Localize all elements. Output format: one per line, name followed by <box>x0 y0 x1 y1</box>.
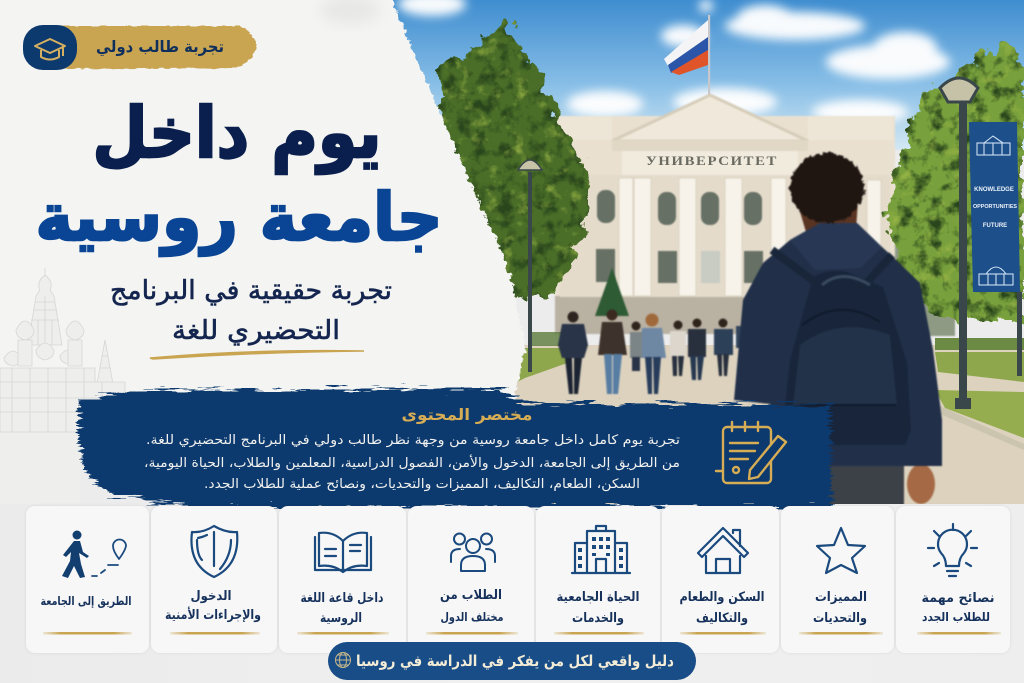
hair <box>790 153 864 223</box>
card: campus life: والخدمات <box>572 611 624 626</box>
panel text <box>144 433 680 492</box>
right tree <box>884 42 1024 322</box>
underline <box>426 632 518 634</box>
card: entry and security <box>151 506 277 653</box>
title line 1: يوم داخل <box>92 92 382 175</box>
icon: campus building <box>572 526 630 573</box>
hand <box>907 464 935 504</box>
topic cards <box>26 506 1010 653</box>
badge text: تجربة طالب دولي <box>96 37 224 57</box>
underline <box>799 632 883 634</box>
banner words: OPPORTUNITIES <box>973 204 1017 210</box>
icon: light bulb <box>928 524 977 576</box>
subtitle <box>110 276 392 359</box>
label: نصائح مهمة <box>922 591 994 606</box>
card: international students: مختلف الدول <box>440 610 504 625</box>
card: housing, food, costs <box>662 506 779 653</box>
label: الحياة الجامعية <box>556 590 640 605</box>
underline <box>43 632 132 634</box>
underline <box>680 632 766 634</box>
background: campus photo <box>380 0 1024 510</box>
underline <box>297 632 389 634</box>
ground <box>500 332 1024 510</box>
card: international students <box>408 506 534 653</box>
main student from behind <box>734 153 942 510</box>
label: الطلاب من <box>440 588 502 603</box>
underline <box>170 632 260 634</box>
panel text: السكن، الطعام، التكاليف، المميزات والتحديات، ونصائح عملية للطلاب الجدد. <box>204 477 640 492</box>
clouds <box>398 0 950 124</box>
card: housing, food, costs: والتكاليف <box>696 611 748 626</box>
label: المميزات <box>815 590 867 605</box>
bottom paper background <box>0 400 80 510</box>
icon: globe <box>336 652 350 668</box>
card: classroom <box>279 506 406 653</box>
flag <box>664 15 710 97</box>
university building <box>555 95 955 336</box>
gold underline <box>150 351 364 359</box>
torn white paper panel <box>0 0 526 405</box>
sky <box>380 0 1024 150</box>
backpack <box>785 271 911 445</box>
building sign: УНИВЕРСИТЕТ <box>646 153 778 168</box>
banner icon top <box>977 136 1010 155</box>
panel heading: مختصر المحتوى <box>402 405 532 424</box>
title <box>36 92 442 257</box>
label: الدخول <box>190 589 232 604</box>
icon: walking person <box>62 530 126 578</box>
card: important tips <box>896 506 1010 653</box>
banner words: KNOWLEDGE <box>974 187 1014 193</box>
underline <box>554 632 644 634</box>
underline <box>917 632 1001 634</box>
neck <box>798 200 858 232</box>
icon: star <box>817 528 865 573</box>
card: pros and challenges <box>781 506 894 653</box>
panel text: من الطريق إلى الجامعة، الدخول والأمن، الفصول الدراسية، المعلمين والطلاب، الحياة اليومية، <box>144 454 680 471</box>
jeans <box>820 455 904 510</box>
subtitle line 1: تجربة حقيقية في البرنامج <box>110 276 392 306</box>
lamp posts <box>518 78 1022 409</box>
windows <box>596 190 763 283</box>
kremlin sketch <box>0 268 125 432</box>
left tree <box>440 18 629 316</box>
summary panel <box>78 389 832 508</box>
card: pros and challenges: والتحديات <box>813 611 867 626</box>
badge: international student <box>23 25 256 70</box>
footer text: دليل واقعي لكل من يفكر في الدراسة في روسيا <box>356 652 674 670</box>
badge gold strip <box>60 26 256 69</box>
card: classroom: الروسية <box>320 611 362 626</box>
icon: notepad and pencil <box>716 422 786 483</box>
banner words: FUTURE <box>983 223 1007 229</box>
icon: graduation cap <box>23 25 77 70</box>
card: campus life <box>536 506 660 653</box>
title line 2: جامعة روسية <box>36 179 442 257</box>
footer pill <box>328 642 696 680</box>
hoodie <box>734 223 942 466</box>
paper shading <box>320 0 380 24</box>
label: الطريق إلى الجامعة <box>40 594 132 608</box>
panel text: تجربة يوم كامل داخل جامعة روسية من وجهة نظر طالب دولي في البرنامج التحضيري للغة. <box>146 433 680 448</box>
columns <box>619 178 881 296</box>
card: entry and security: والإجراءات الأمنية <box>165 606 261 623</box>
walking students <box>558 310 742 394</box>
label: السكن والطعام <box>680 590 764 605</box>
banner <box>969 122 1020 292</box>
label: داخل قاعة اللغة <box>300 591 384 606</box>
icon: house <box>698 528 748 573</box>
banner icon bottom <box>979 267 1013 285</box>
icon: open book <box>315 533 371 572</box>
card: road to university <box>26 506 149 653</box>
card: important tips: للطلاب الجدد <box>922 610 990 624</box>
brush background <box>78 389 832 508</box>
bottom area <box>0 504 1024 683</box>
icon: shield <box>191 526 237 577</box>
subtitle line 2: التحضيري للغة <box>172 316 340 346</box>
banner words <box>973 187 1017 229</box>
icon: group of people <box>451 534 495 571</box>
